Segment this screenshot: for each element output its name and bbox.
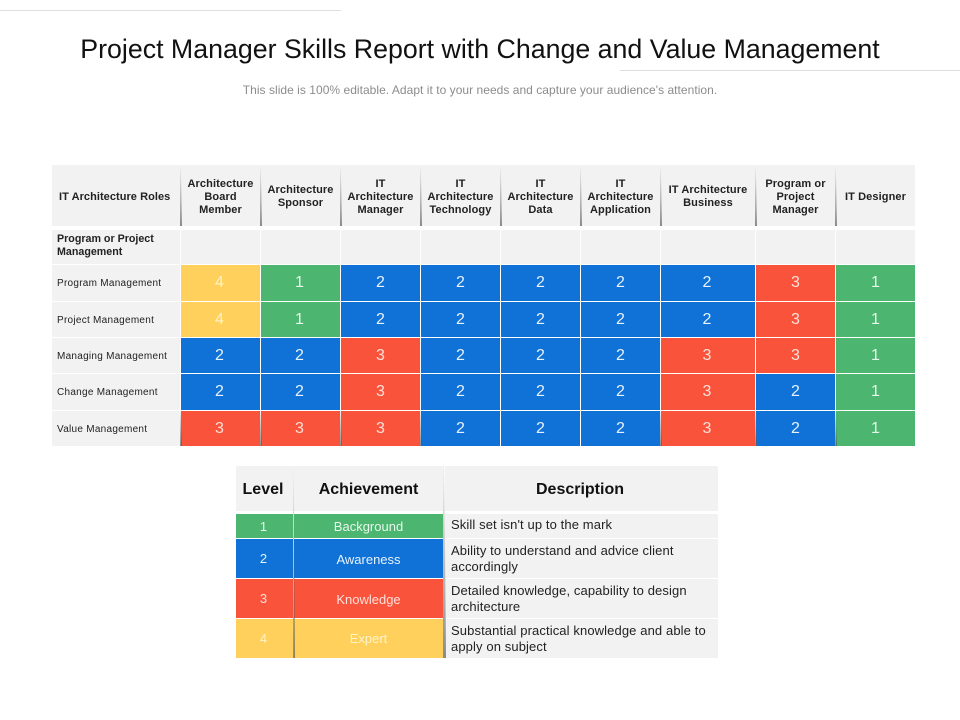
skills matrix table [52, 165, 915, 446]
row: Project Management: 2 [536, 310, 545, 328]
row: Program Management: 1 [295, 274, 304, 291]
table header row: IT [616, 178, 625, 190]
row: Project Management: Project Management [57, 314, 154, 326]
table header row: Architecture [588, 190, 654, 202]
row: Change Management: 2 [215, 383, 224, 400]
legend row: level 1: Background [334, 518, 403, 534]
row: Project Management: 2 [456, 310, 465, 328]
row: Value Management [52, 411, 915, 446]
row: Managing Management: 2 [295, 346, 304, 364]
row: Project Management: 2 [376, 310, 385, 328]
row: Program Management: 2 [536, 274, 545, 291]
row: Program Management [52, 265, 915, 301]
row: Managing Management: 1 [871, 346, 880, 364]
row: Project Management [52, 302, 915, 337]
legend header row: Level [243, 480, 283, 498]
row: Change Management: 2 [536, 383, 545, 400]
row: Value Management: 3 [703, 420, 711, 436]
row: Change Management: 2 [616, 383, 625, 400]
table header row: IT [376, 178, 385, 190]
legend row: level 4 [236, 619, 718, 658]
legend row: level 4: apply on subject [451, 638, 547, 654]
table header row: IT [456, 178, 465, 190]
table header row: IT Architecture Roles [59, 190, 170, 202]
row: Value Management: 2 [456, 420, 465, 436]
row: Value Management: 3 [295, 420, 304, 436]
table header row: Architecture [188, 178, 254, 190]
table header row: Architecture [508, 190, 574, 202]
table header row: Architecture [348, 190, 414, 202]
table header row: Member [199, 204, 242, 216]
row: Program Management: 2 [616, 274, 625, 291]
row: Managing Management: 3 [703, 346, 711, 364]
row: Managing Management: 2 [616, 346, 625, 364]
row: Change Management: 3 [703, 383, 711, 400]
table header row: Manager [773, 204, 818, 216]
row: Project Management: 1 [295, 310, 304, 328]
legend row: level 2: Awareness [336, 552, 401, 566]
title: Project Manager Skills Report with Change and Value Management [80, 34, 880, 64]
table header row: Sponsor [278, 197, 323, 209]
row: Change Management: 3 [376, 383, 385, 400]
legend row: level 3 [236, 579, 718, 618]
row: Value Management: 2 [536, 420, 545, 436]
row: Program Management: 3 [791, 274, 800, 291]
legend row: level 3: Knowledge [336, 592, 401, 606]
table header row: Manager [358, 204, 403, 216]
legend row: level 1: Skill set isn't up to the mark [451, 517, 612, 532]
section row: Program or Project Management: Management [57, 246, 122, 258]
row: Program Management: 2 [376, 274, 385, 291]
legend row: level 1: 1 [260, 518, 267, 534]
row: Change Management: 2 [295, 383, 304, 400]
legend row: level 1 [236, 514, 718, 538]
legend row: level 4: Expert [350, 631, 387, 646]
legend row: level 3: 3 [260, 591, 267, 606]
table header row: Application [590, 204, 651, 216]
row: Value Management: 3 [215, 420, 224, 436]
row: Project Management: 2 [703, 310, 711, 328]
row: Managing Management: Managing Management [57, 350, 167, 362]
row: Change Management: 2 [791, 383, 800, 400]
section row: Program or Project Management: Program or Project [57, 232, 154, 244]
table header row: Technology [430, 204, 491, 216]
legend table [236, 466, 718, 658]
table header row: IT [536, 178, 545, 190]
legend row: level 4: 4 [260, 631, 267, 646]
legend row: level 2: Ability to understand and advice client [451, 543, 674, 558]
row: Program Management: Program Management [57, 278, 161, 289]
row: Project Management: 3 [791, 310, 800, 328]
table header row: Program or [765, 178, 826, 190]
row: Value Management: 3 [376, 420, 385, 436]
row: Managing Management: 2 [456, 346, 465, 364]
row: Value Management: Value Management [57, 424, 147, 434]
legend row: level 4: Substantial practical knowledge and able to [451, 622, 706, 638]
row: Change Management [52, 374, 915, 410]
row: Change Management: 2 [456, 383, 465, 400]
table header row: Board [204, 190, 237, 202]
table header row: IT Designer [845, 190, 906, 202]
legend header row [236, 466, 718, 511]
row: Value Management: 2 [791, 420, 800, 436]
row: Managing Management: 2 [215, 346, 224, 364]
table header row: Project [776, 190, 814, 202]
row: Project Management: 4 [215, 310, 224, 328]
row: Managing Management [52, 338, 915, 373]
table header row: Architecture [268, 184, 334, 196]
table header row: IT Architecture [669, 184, 747, 196]
table header row: Business [683, 197, 733, 209]
legend row: level 3: architecture [451, 599, 520, 614]
row: Managing Management: 2 [536, 346, 545, 364]
legend header row: Description [536, 480, 624, 498]
row: Program Management: 4 [215, 274, 224, 291]
row: Change Management: 1 [871, 383, 880, 400]
legend row: level 2: accordingly [451, 559, 518, 574]
section row: Program or Project Management [52, 230, 915, 264]
row: Program Management: 1 [871, 274, 880, 291]
row: Value Management: 2 [616, 420, 625, 436]
legend header row: Achievement [319, 480, 418, 498]
row: Project Management: 1 [871, 310, 880, 328]
table header row [52, 165, 915, 226]
row: Program Management: 2 [703, 274, 711, 291]
legend row: level 2: 2 [260, 551, 267, 566]
legend row: level 2 [236, 539, 718, 578]
row: Managing Management: 3 [376, 346, 385, 364]
table header row: Data [528, 204, 553, 216]
table header row: Architecture [428, 190, 494, 202]
row: Program Management: 2 [456, 274, 465, 291]
legend row: level 3: Detailed knowledge, capability to design [451, 583, 687, 598]
row: Value Management: 1 [871, 420, 880, 436]
subtitle: This slide is 100% editable. Adapt it to your needs and capture your audience's attention. [243, 83, 717, 97]
row: Change Management: Change Management [57, 387, 158, 398]
row: Project Management: 2 [616, 310, 625, 328]
row: Managing Management: 3 [791, 346, 800, 364]
